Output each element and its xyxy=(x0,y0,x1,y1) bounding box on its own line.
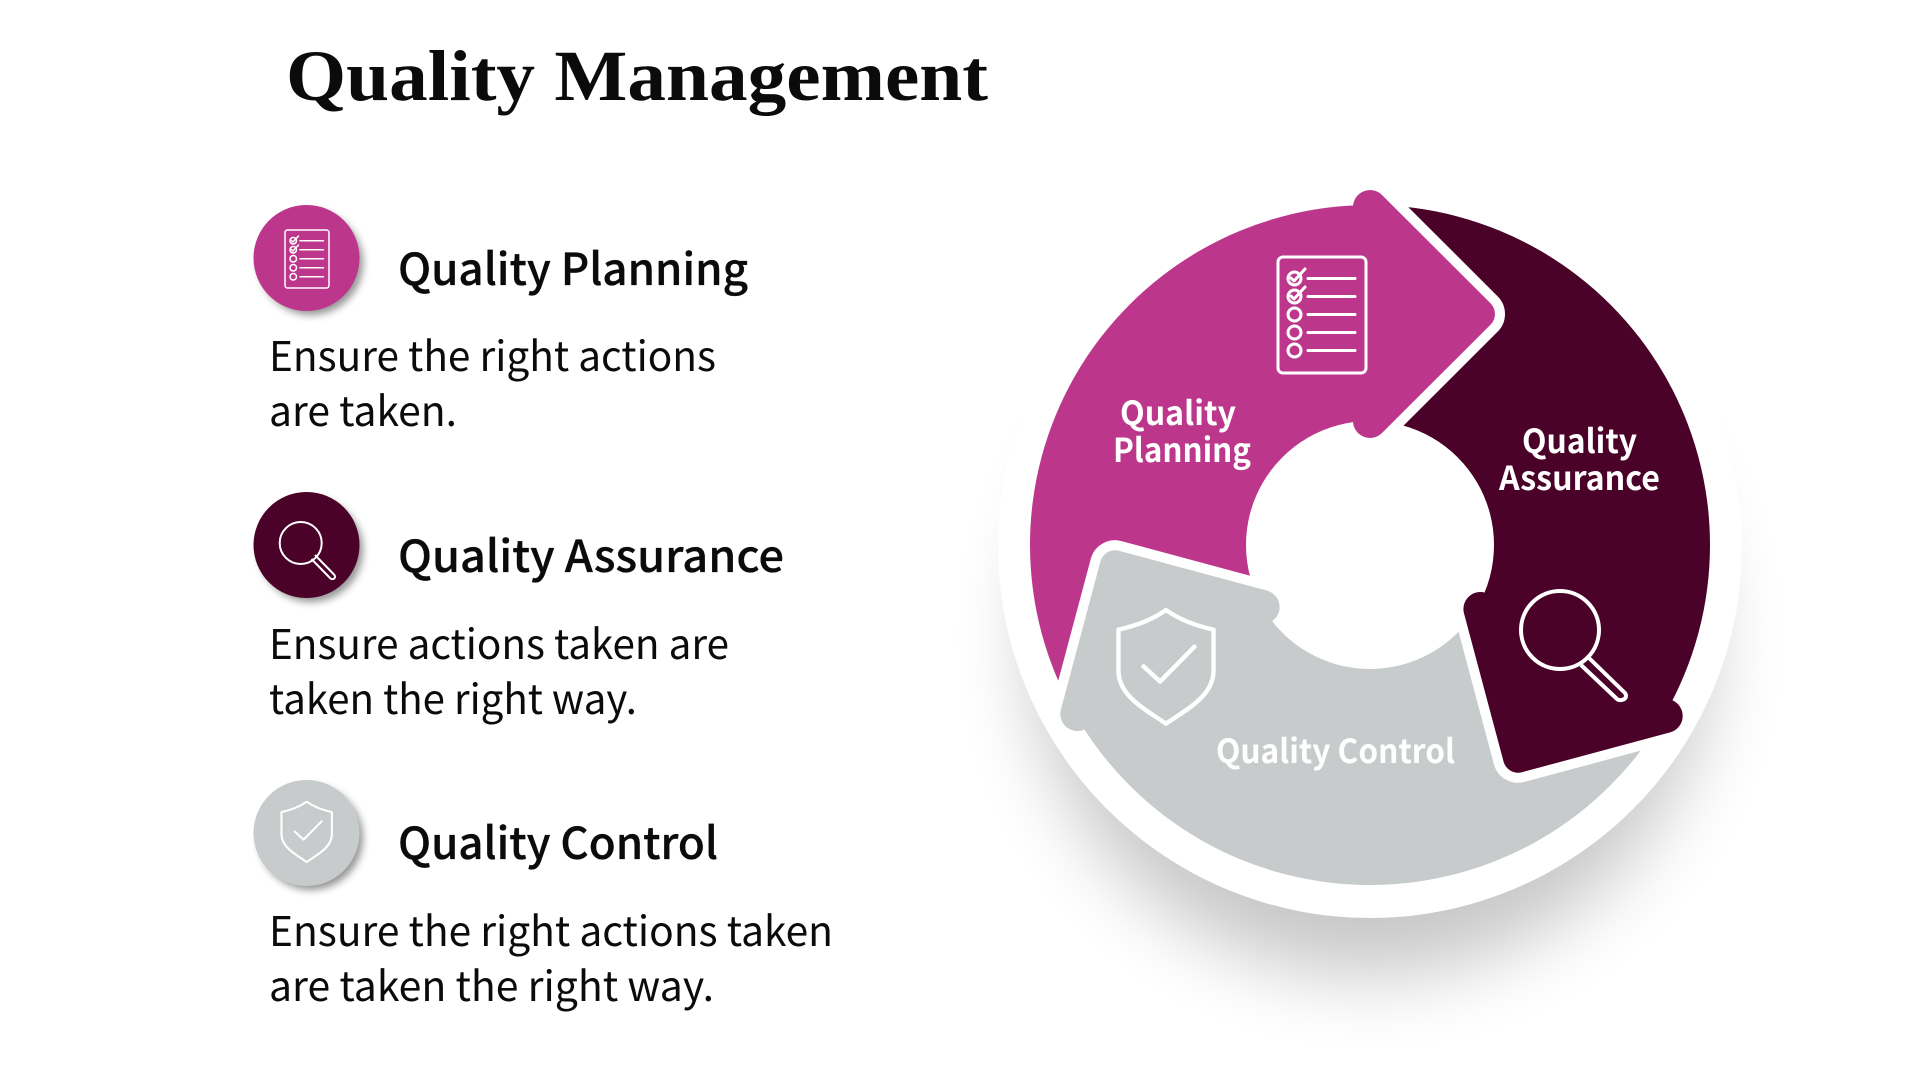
text: control description: Ensure the right actions taken xyxy=(269,898,833,958)
text: control description xyxy=(269,898,833,1013)
heading: quality control: Quality Control xyxy=(398,808,718,872)
arrowhead: assurance xyxy=(1403,586,1689,833)
panel: quality planning item xyxy=(254,205,748,438)
label: quality assurance: Quality xyxy=(1522,415,1637,463)
label: quality planning xyxy=(1113,387,1251,472)
text: planning description: Ensure the right actions xyxy=(269,323,716,383)
icon: magnifier xyxy=(1521,591,1626,700)
text: assurance description xyxy=(269,611,729,726)
segment: quality assurance body xyxy=(1370,205,1710,715)
panel: quality control item xyxy=(254,780,833,1013)
icon: checklist xyxy=(1278,257,1366,373)
text: planning description xyxy=(269,323,716,438)
text: assurance description: Ensure actions taken are xyxy=(269,611,729,671)
icon: planning badge xyxy=(254,205,363,315)
icon: shield xyxy=(1118,610,1214,724)
label: quality control: Quality Control xyxy=(1216,725,1455,773)
segment: quality planning body xyxy=(1030,205,1370,715)
arrowhead: planning xyxy=(1353,190,1495,438)
segment: quality control body xyxy=(1076,607,1664,885)
label: quality assurance xyxy=(1498,415,1660,500)
panel: quality assurance item xyxy=(254,492,784,726)
text: assurance description: taken the right way. xyxy=(269,666,637,726)
text: control description: are taken the right way. xyxy=(269,953,714,1013)
arrowhead: control xyxy=(1000,490,1286,737)
title: Quality Management xyxy=(286,36,988,116)
icon: control badge xyxy=(254,780,363,890)
icon: assurance badge xyxy=(254,492,363,602)
label: quality planning: Quality xyxy=(1120,387,1236,435)
heading: quality planning: Quality Planning xyxy=(398,234,748,298)
text: planning description: are taken. xyxy=(269,378,457,438)
label: quality planning: Planning xyxy=(1113,424,1251,472)
cycle diagram xyxy=(998,174,1742,975)
heading: quality assurance: Quality Assurance xyxy=(398,521,784,585)
label: quality assurance: Assurance xyxy=(1498,452,1660,500)
